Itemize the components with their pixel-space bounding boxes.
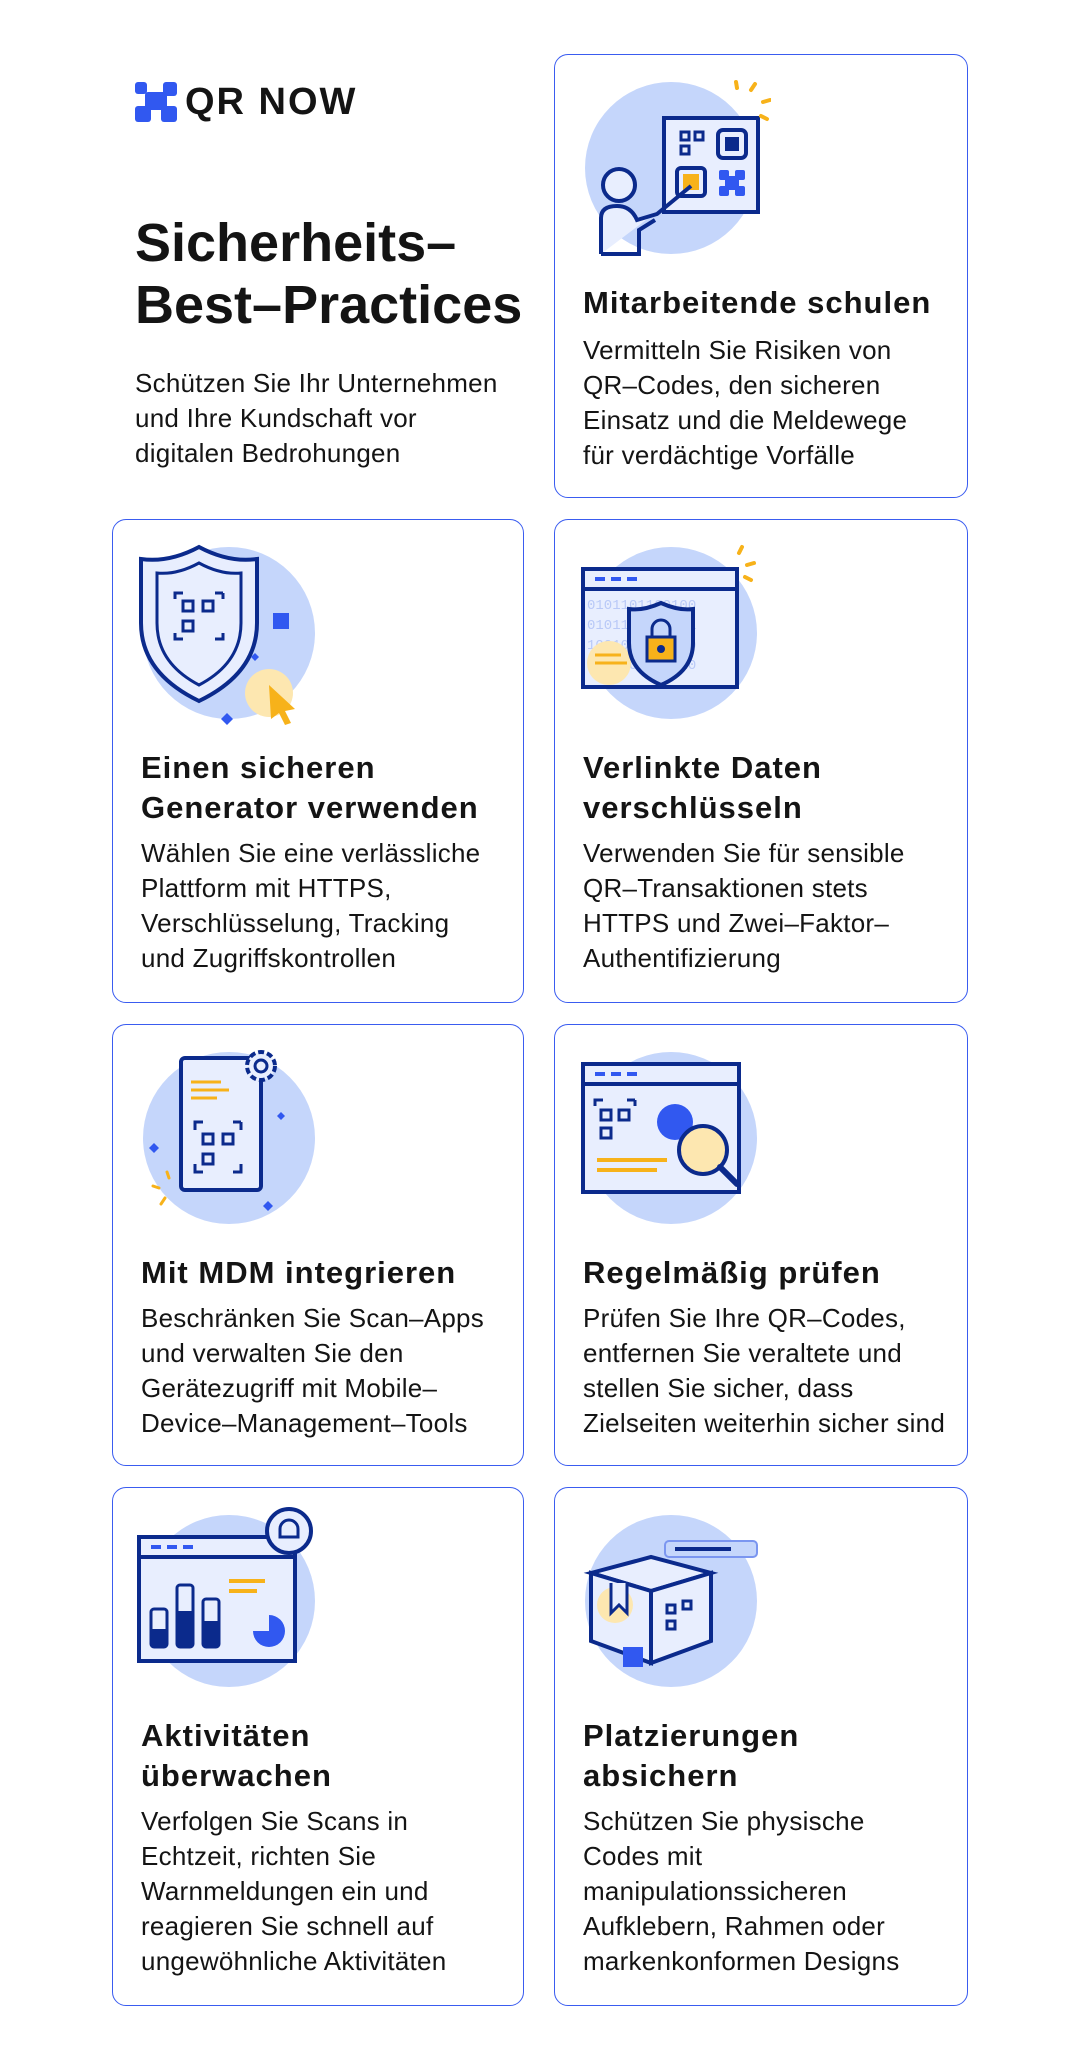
body text: [583, 838, 905, 973]
icon: shield with QR and cursor: [139, 544, 315, 725]
body text: und verwalten Sie den: [141, 1338, 404, 1368]
heading: [141, 1718, 332, 1793]
body text: HTTPS und Zwei–Faktor–: [583, 908, 889, 938]
body text: Codes mit: [583, 1841, 702, 1871]
body text: stellen Sie sicher, dass: [583, 1373, 853, 1403]
body text: [141, 1303, 484, 1438]
body text: [583, 335, 907, 470]
body text: ungewöhnliche Aktivitäten: [141, 1946, 446, 1976]
body text: und Zugriffskontrollen: [141, 943, 396, 973]
body text: Plattform mit HTTPS,: [141, 873, 392, 903]
body text: Warnmeldungen ein und: [141, 1876, 429, 1906]
icon: browser with lock shield: [581, 544, 757, 719]
body text: entfernen Sie veraltete und: [583, 1338, 902, 1368]
body text: Beschränken Sie Scan–Apps: [141, 1303, 484, 1333]
panel: Verlinkte Daten: [554, 519, 968, 1003]
title: Sicherheits–: [135, 213, 456, 273]
heading: Verlinkte Daten: [583, 750, 822, 785]
body text: Einsatz und die Meldewege: [583, 405, 907, 435]
heading: überwachen: [141, 1758, 332, 1793]
icon: browser with magnifier: [581, 1052, 757, 1224]
logo: QR NOW: [185, 81, 357, 123]
body text: Device–Management–Tools: [141, 1408, 468, 1438]
heading: Regelmäßig prüfen: [583, 1255, 881, 1290]
subtitle: digitalen Bedrohungen: [135, 438, 400, 468]
icon: browser with lock shield: 0101101100100: [587, 598, 696, 614]
body text: reagieren Sie schnell auf: [141, 1911, 433, 1941]
panel: Mitarbeitende schulen: [554, 54, 968, 498]
heading: [583, 750, 822, 825]
body text: [141, 1806, 446, 1976]
heading: Aktivitäten: [141, 1718, 310, 1753]
body text: Zielseiten weiterhin sicher sind: [583, 1408, 945, 1438]
body text: Schützen Sie physische: [583, 1806, 865, 1836]
heading: Generator verwenden: [141, 790, 479, 825]
panel: Platzierungen absichern: [554, 1487, 968, 2006]
panel: Aktivitäten überwachen: [112, 1487, 524, 2006]
body text: manipulationssicheren: [583, 1876, 847, 1906]
heading: Platzierungen: [583, 1718, 799, 1753]
body text: markenkonformen Designs: [583, 1946, 899, 1976]
subtitle: Schützen Sie Ihr Unternehmen: [135, 368, 498, 398]
title: [135, 213, 522, 335]
heading: [141, 750, 479, 825]
body text: [583, 1303, 945, 1438]
icon: browser with lock shield: 1001011010100: [587, 638, 696, 654]
heading: absichern: [583, 1758, 738, 1793]
subtitle: [135, 368, 498, 468]
icon: browser with lock shield: 0101101001010: [587, 658, 696, 674]
icon: browser with lock shield: 0101100101001: [587, 618, 696, 634]
panel: sicherer Generator: [112, 519, 524, 1003]
icon: dashboard with bell: [137, 1507, 315, 1687]
heading: Einen sicheren: [141, 750, 376, 785]
icon: trainer with QR board: [585, 80, 771, 256]
panel: Regelmäßig prüfen: [554, 1024, 968, 1466]
body text: Prüfen Sie Ihre QR–Codes,: [583, 1303, 906, 1333]
body text: QR–Codes, den sicheren: [583, 370, 880, 400]
subtitle: und Ihre Kundschaft vor: [135, 403, 417, 433]
body text: Gerätezugriff mit Mobile–: [141, 1373, 437, 1403]
body text: Wählen Sie eine verlässliche: [141, 838, 480, 868]
body text: Verwenden Sie für sensible: [583, 838, 905, 868]
heading: [583, 1718, 799, 1793]
body text: Echtzeit, richten Sie: [141, 1841, 376, 1871]
body text: für verdächtige Vorfälle: [583, 440, 855, 470]
heading: Mit MDM integrieren: [141, 1255, 456, 1290]
title: Best–Practices: [135, 275, 522, 335]
body text: QR–Transaktionen stets: [583, 873, 868, 903]
body text: Verschlüsselung, Tracking: [141, 908, 449, 938]
panel: MDM: [112, 1024, 524, 1466]
body text: Vermitteln Sie Risiken von: [583, 335, 892, 365]
body text: Aufklebern, Rahmen oder: [583, 1911, 885, 1941]
body text: [583, 1806, 899, 1976]
icon: phone with gear and QR: [143, 1050, 315, 1224]
body text: Authentifizierung: [583, 943, 781, 973]
body text: Verfolgen Sie Scans in: [141, 1806, 408, 1836]
body text: [141, 838, 480, 973]
heading: Mitarbeitende schulen: [583, 285, 931, 320]
heading: verschlüsseln: [583, 790, 803, 825]
icon: box with QR code: [584, 1515, 758, 1687]
